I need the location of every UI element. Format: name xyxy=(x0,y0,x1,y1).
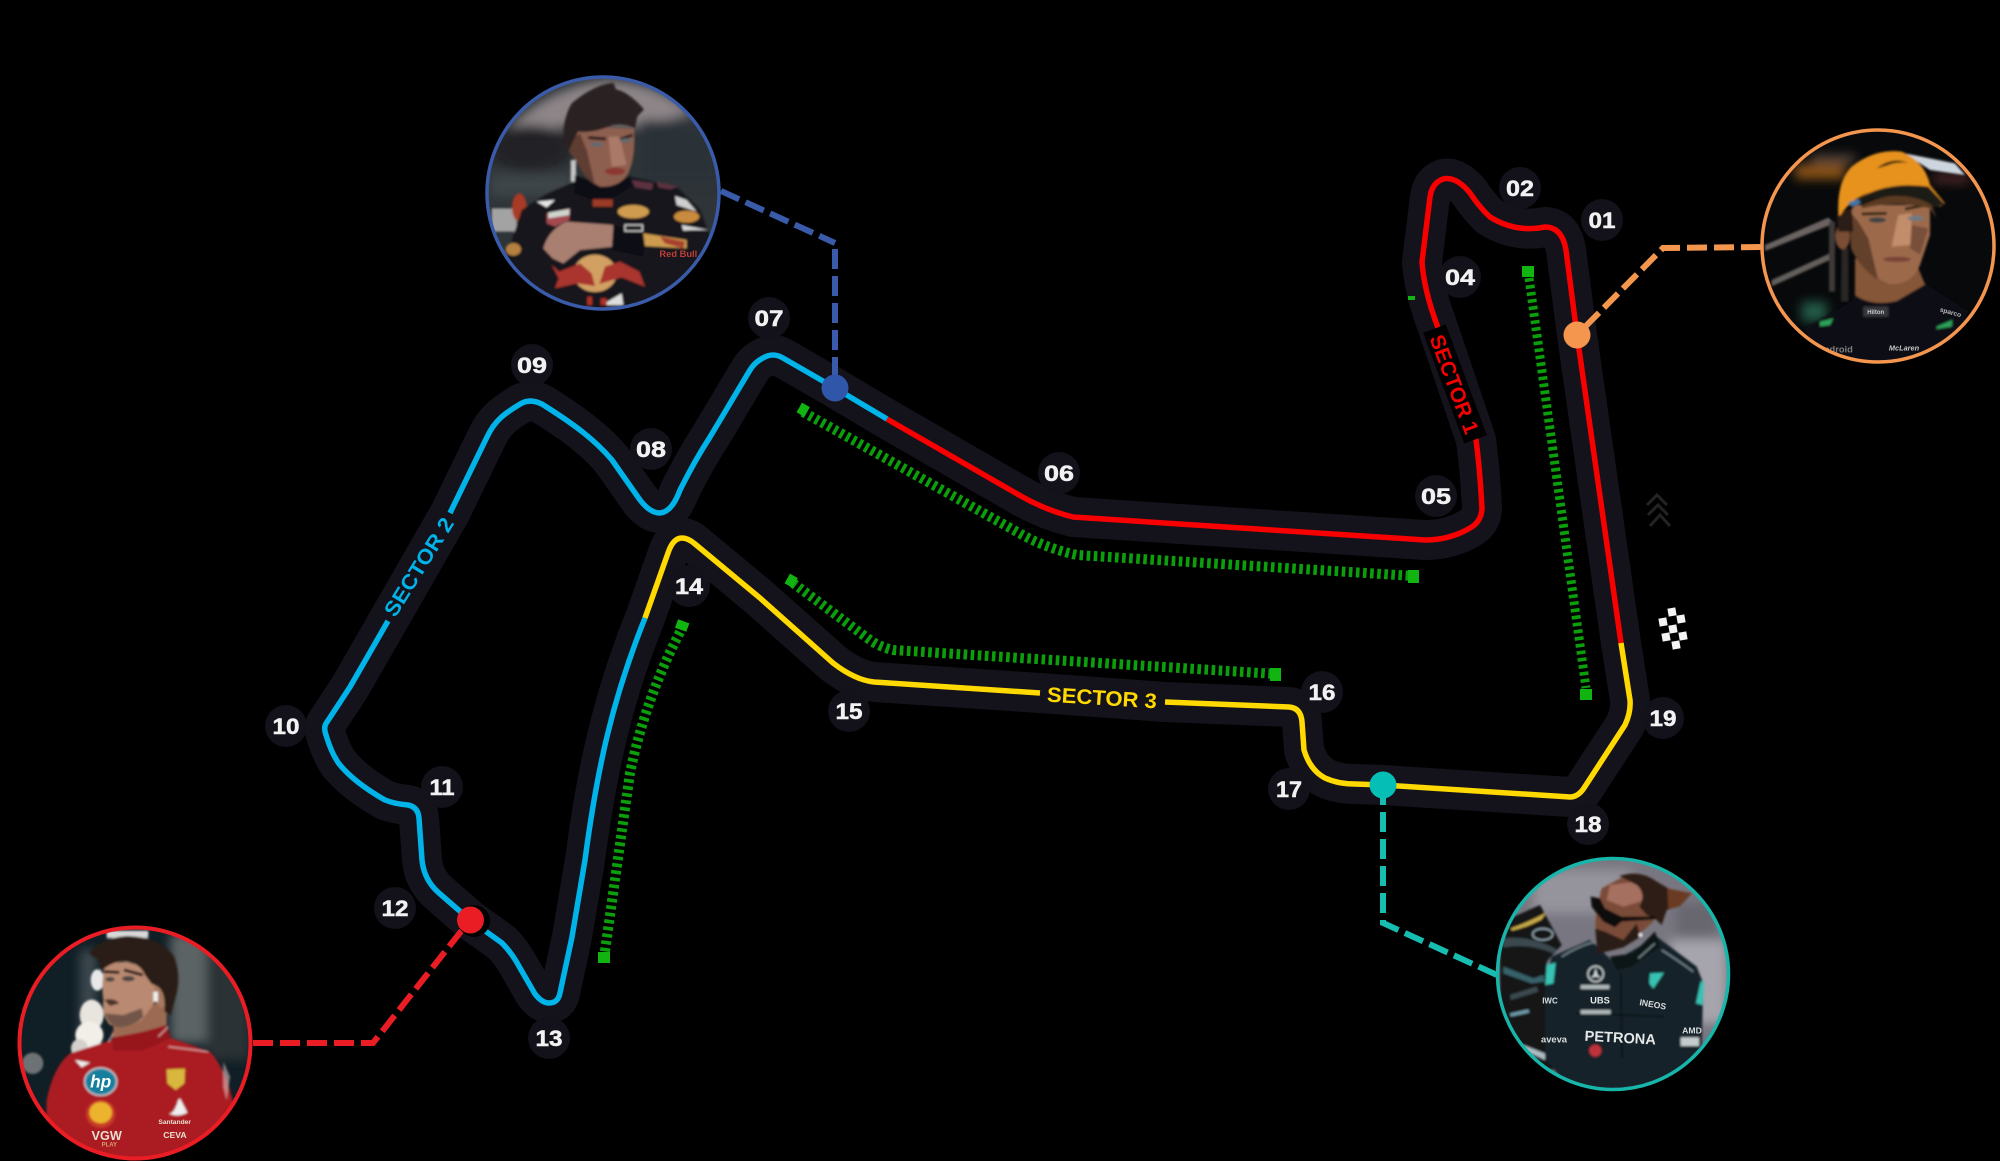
corner numbers: 15 xyxy=(836,699,862,724)
connector: teal driver xyxy=(1370,772,1497,975)
portrait: Red Bull driver xyxy=(483,73,723,317)
connector: red driver xyxy=(253,905,490,1043)
sector 3 label: SECTOR 3 xyxy=(1046,684,1158,713)
ring xyxy=(1762,130,1994,362)
corner numbers: 12 xyxy=(382,896,408,921)
corner numbers: 11 xyxy=(430,775,454,800)
connector: blue driver xyxy=(721,191,848,402)
corner numbers xyxy=(265,167,1684,1059)
corner numbers: 19 xyxy=(1650,706,1676,731)
icon: chequered flag xyxy=(1658,607,1688,650)
corner numbers: 08 xyxy=(636,437,666,462)
icon: direction chevrons xyxy=(1647,495,1670,526)
ring xyxy=(20,928,250,1158)
portrait: McLaren driver: McLaren xyxy=(1889,343,1920,352)
portrait: Ferrari driver: CEVA xyxy=(163,1130,187,1140)
corner numbers: 04 xyxy=(1445,265,1476,290)
sector 2 label: SECTOR 2 xyxy=(380,514,459,621)
corner numbers: 06 xyxy=(1044,461,1074,486)
suit lettering: Hilton xyxy=(1867,310,1884,316)
corner numbers: 14 xyxy=(675,574,704,599)
ring xyxy=(1498,858,1728,1090)
portrait: Ferrari driver: PLAY xyxy=(102,1143,117,1149)
portrait: Mercedes driver xyxy=(1493,855,1733,1095)
corner numbers: 17 xyxy=(1276,777,1302,802)
sector 2 line (cyan) xyxy=(325,355,887,1003)
ring xyxy=(487,77,719,309)
portrait: Mercedes driver: UBS xyxy=(1590,995,1610,1005)
corner numbers: 09 xyxy=(517,353,547,378)
portrait: McLaren driver xyxy=(1758,127,1998,367)
portrait: Ferrari driver xyxy=(17,925,257,1161)
sector 3 line (yellow) xyxy=(645,538,1630,797)
portrait: Mercedes driver: AMD xyxy=(1682,1025,1702,1035)
pit lane and run-off markers xyxy=(604,278,1586,958)
run-off end markers xyxy=(598,266,1592,963)
corner numbers: 16 xyxy=(1308,680,1336,705)
connector: orange driver xyxy=(1564,247,1761,348)
sector 1 line (red) xyxy=(887,179,1621,643)
corner numbers: 13 xyxy=(536,1026,562,1051)
sector 1 label: SECTOR 1 xyxy=(1425,332,1483,438)
suit lettering: hp xyxy=(90,1072,112,1092)
portrait: Mercedes driver: aveva xyxy=(1541,1035,1568,1045)
suit lettering: PETRONA xyxy=(1584,1029,1657,1049)
corner numbers: 05 xyxy=(1421,484,1451,509)
portrait: McLaren driver: sparco xyxy=(1939,307,1962,319)
corner numbers: 02 xyxy=(1506,176,1534,201)
corner numbers: 07 xyxy=(754,306,784,331)
portrait: Mercedes driver: INEOS xyxy=(1639,997,1667,1012)
portrait: Mercedes driver: IWC xyxy=(1542,996,1558,1005)
portrait: McLaren driver: ndroid xyxy=(1824,344,1853,354)
suit lettering: Red Bull xyxy=(659,249,697,259)
corner numbers: 10 xyxy=(272,714,300,739)
corner numbers: 18 xyxy=(1574,812,1602,837)
portrait: Ferrari driver: Santander xyxy=(158,1119,191,1126)
corner numbers: 01 xyxy=(1588,208,1616,233)
track surface xyxy=(325,179,1630,1003)
portrait: Ferrari driver: VGW xyxy=(92,1129,122,1143)
